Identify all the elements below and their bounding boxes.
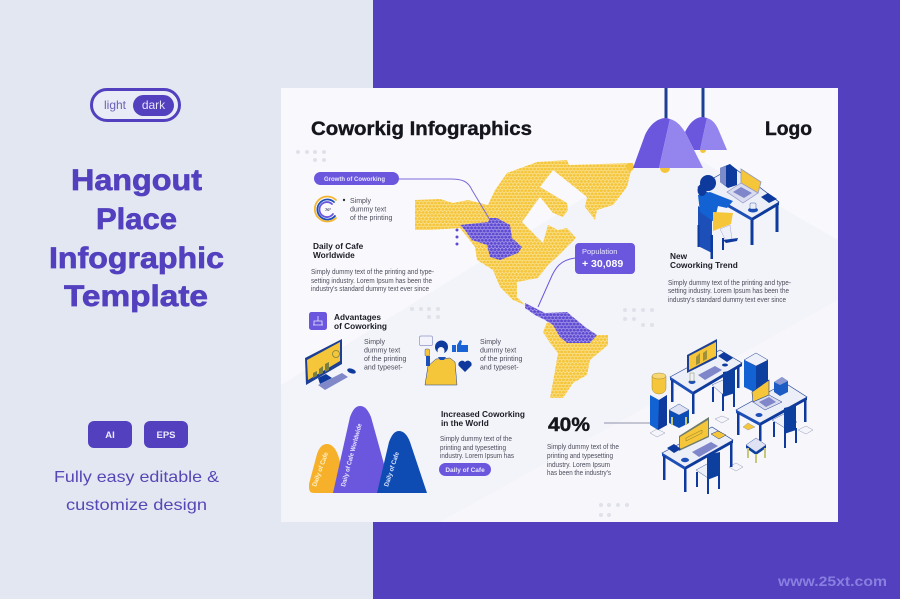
light dark toggle: dark	[142, 98, 166, 112]
new coworking trend text block: setting industry. Lorem Ipsum has been the	[668, 288, 789, 295]
desk two	[736, 377, 807, 448]
40 percent statistic: has been the industry's	[547, 470, 611, 477]
icon: desktop computer	[305, 339, 357, 390]
new coworking trend text block: New	[670, 251, 688, 261]
person caption: dummy text	[480, 348, 516, 354]
hexagon map of the Americas	[415, 160, 633, 398]
editable caption: customize design	[66, 497, 207, 514]
EPS badge: EPS	[156, 430, 176, 441]
gauge caption	[343, 198, 393, 222]
daily of cafe text block: setting industry. Lorem Ipsum has been the	[311, 278, 432, 285]
new coworking trend text block: Coworking Trend	[670, 260, 738, 270]
logo text: Logo	[765, 119, 812, 140]
mountain chart: Daily of Cafe Worldwide	[340, 423, 364, 488]
40 percent statistic: 40%	[548, 415, 590, 436]
new coworking trend text block	[668, 251, 792, 304]
daily of cafe text block: industry's standard dummy text ever since	[311, 286, 429, 293]
growth pill with connector	[314, 172, 490, 220]
AI badge: AI	[105, 430, 115, 441]
gauge caption: dummy text	[350, 206, 386, 214]
watermark: www.25xt.com	[777, 573, 887, 589]
increased coworking text block: printing and typesetting	[440, 445, 506, 452]
daily of cafe text block	[311, 241, 435, 293]
main title: Place	[96, 203, 177, 236]
40 percent statistic: industry. Lorem Ipsum	[547, 462, 610, 469]
desktop caption: and typeset-	[364, 364, 403, 372]
desktop caption: dummy text	[364, 348, 400, 354]
left background panel	[0, 0, 373, 599]
mountain chart	[309, 406, 427, 493]
new coworking trend text block: industry's standard dummy text ever since	[668, 297, 786, 304]
icon: concentric gauge	[315, 197, 336, 222]
main title: Infographic	[49, 242, 224, 275]
person caption	[480, 339, 523, 372]
desktop caption	[364, 339, 407, 372]
water cooler	[650, 373, 667, 437]
filing cabinet	[744, 353, 768, 393]
advantages heading with icon: Advantages	[334, 312, 381, 322]
EPS badge	[144, 421, 188, 448]
daily of cafe text block: Simply dummy text of the printing and type-	[311, 269, 435, 276]
population callout: Population	[582, 247, 617, 256]
desktop caption: of the printing	[364, 356, 407, 363]
daily of cafe pill	[439, 463, 491, 476]
main title: Hangout	[71, 164, 202, 197]
decorative dot clusters	[296, 150, 654, 517]
illustration: woman at desk	[698, 164, 779, 259]
main title: Template	[64, 280, 208, 313]
increased coworking text block: Increased Coworking	[441, 409, 525, 419]
gauge caption: of the printing	[350, 215, 393, 222]
daily of cafe text block: Daily of Cafe	[313, 241, 364, 251]
editable caption: Fully easy editable &	[54, 469, 219, 486]
illustration: office workstations	[650, 339, 813, 494]
population callout: + 30,089	[582, 258, 623, 270]
card heading: Coworkig Infographics	[311, 119, 532, 140]
mountain chart: Daily of Cafe	[311, 451, 330, 488]
advantages heading with icon: of Coworking	[334, 321, 387, 331]
infographic card	[281, 88, 838, 522]
daily of cafe text block: Worldwide	[313, 250, 355, 260]
light dark toggle: light	[104, 98, 127, 112]
increased coworking text block: in the World	[441, 418, 489, 428]
increased coworking text block	[440, 409, 525, 460]
40 percent statistic	[547, 415, 650, 477]
AI badge	[88, 421, 132, 448]
editable caption	[54, 469, 219, 514]
icon: person with phone and reactions	[420, 336, 472, 385]
daily of cafe pill: Daily of Cafe	[445, 467, 485, 474]
floor papers	[715, 416, 813, 471]
bin	[669, 404, 689, 428]
40 percent statistic: printing and typesetting	[547, 453, 613, 460]
person caption: and typeset-	[480, 364, 519, 372]
person caption: Simply	[480, 339, 502, 346]
mountain chart: Daily of Cafe	[383, 451, 401, 488]
increased coworking text block: industry. Lorem Ipsum has	[440, 453, 514, 460]
desk three	[662, 417, 733, 494]
hanging lamps	[626, 88, 727, 173]
person caption: of the printing	[480, 356, 523, 363]
new coworking trend text block: Simply dummy text of the printing and type-	[668, 280, 792, 287]
light dark toggle	[92, 90, 180, 120]
growth pill with connector: Growth of Coworking	[324, 177, 385, 183]
population callout	[538, 243, 635, 307]
icon: concentric gauge: 70°	[325, 207, 331, 212]
increased coworking text block: Simply dummy text of the	[440, 436, 512, 443]
right purple background panel	[373, 0, 900, 599]
40 percent statistic: Simply dummy text of the	[547, 444, 619, 451]
desk one	[670, 339, 742, 414]
main title	[49, 164, 224, 313]
desktop caption: Simply	[364, 339, 386, 346]
advantages heading with icon	[309, 312, 387, 331]
gauge caption: Simply	[350, 198, 372, 205]
stool	[746, 438, 766, 463]
